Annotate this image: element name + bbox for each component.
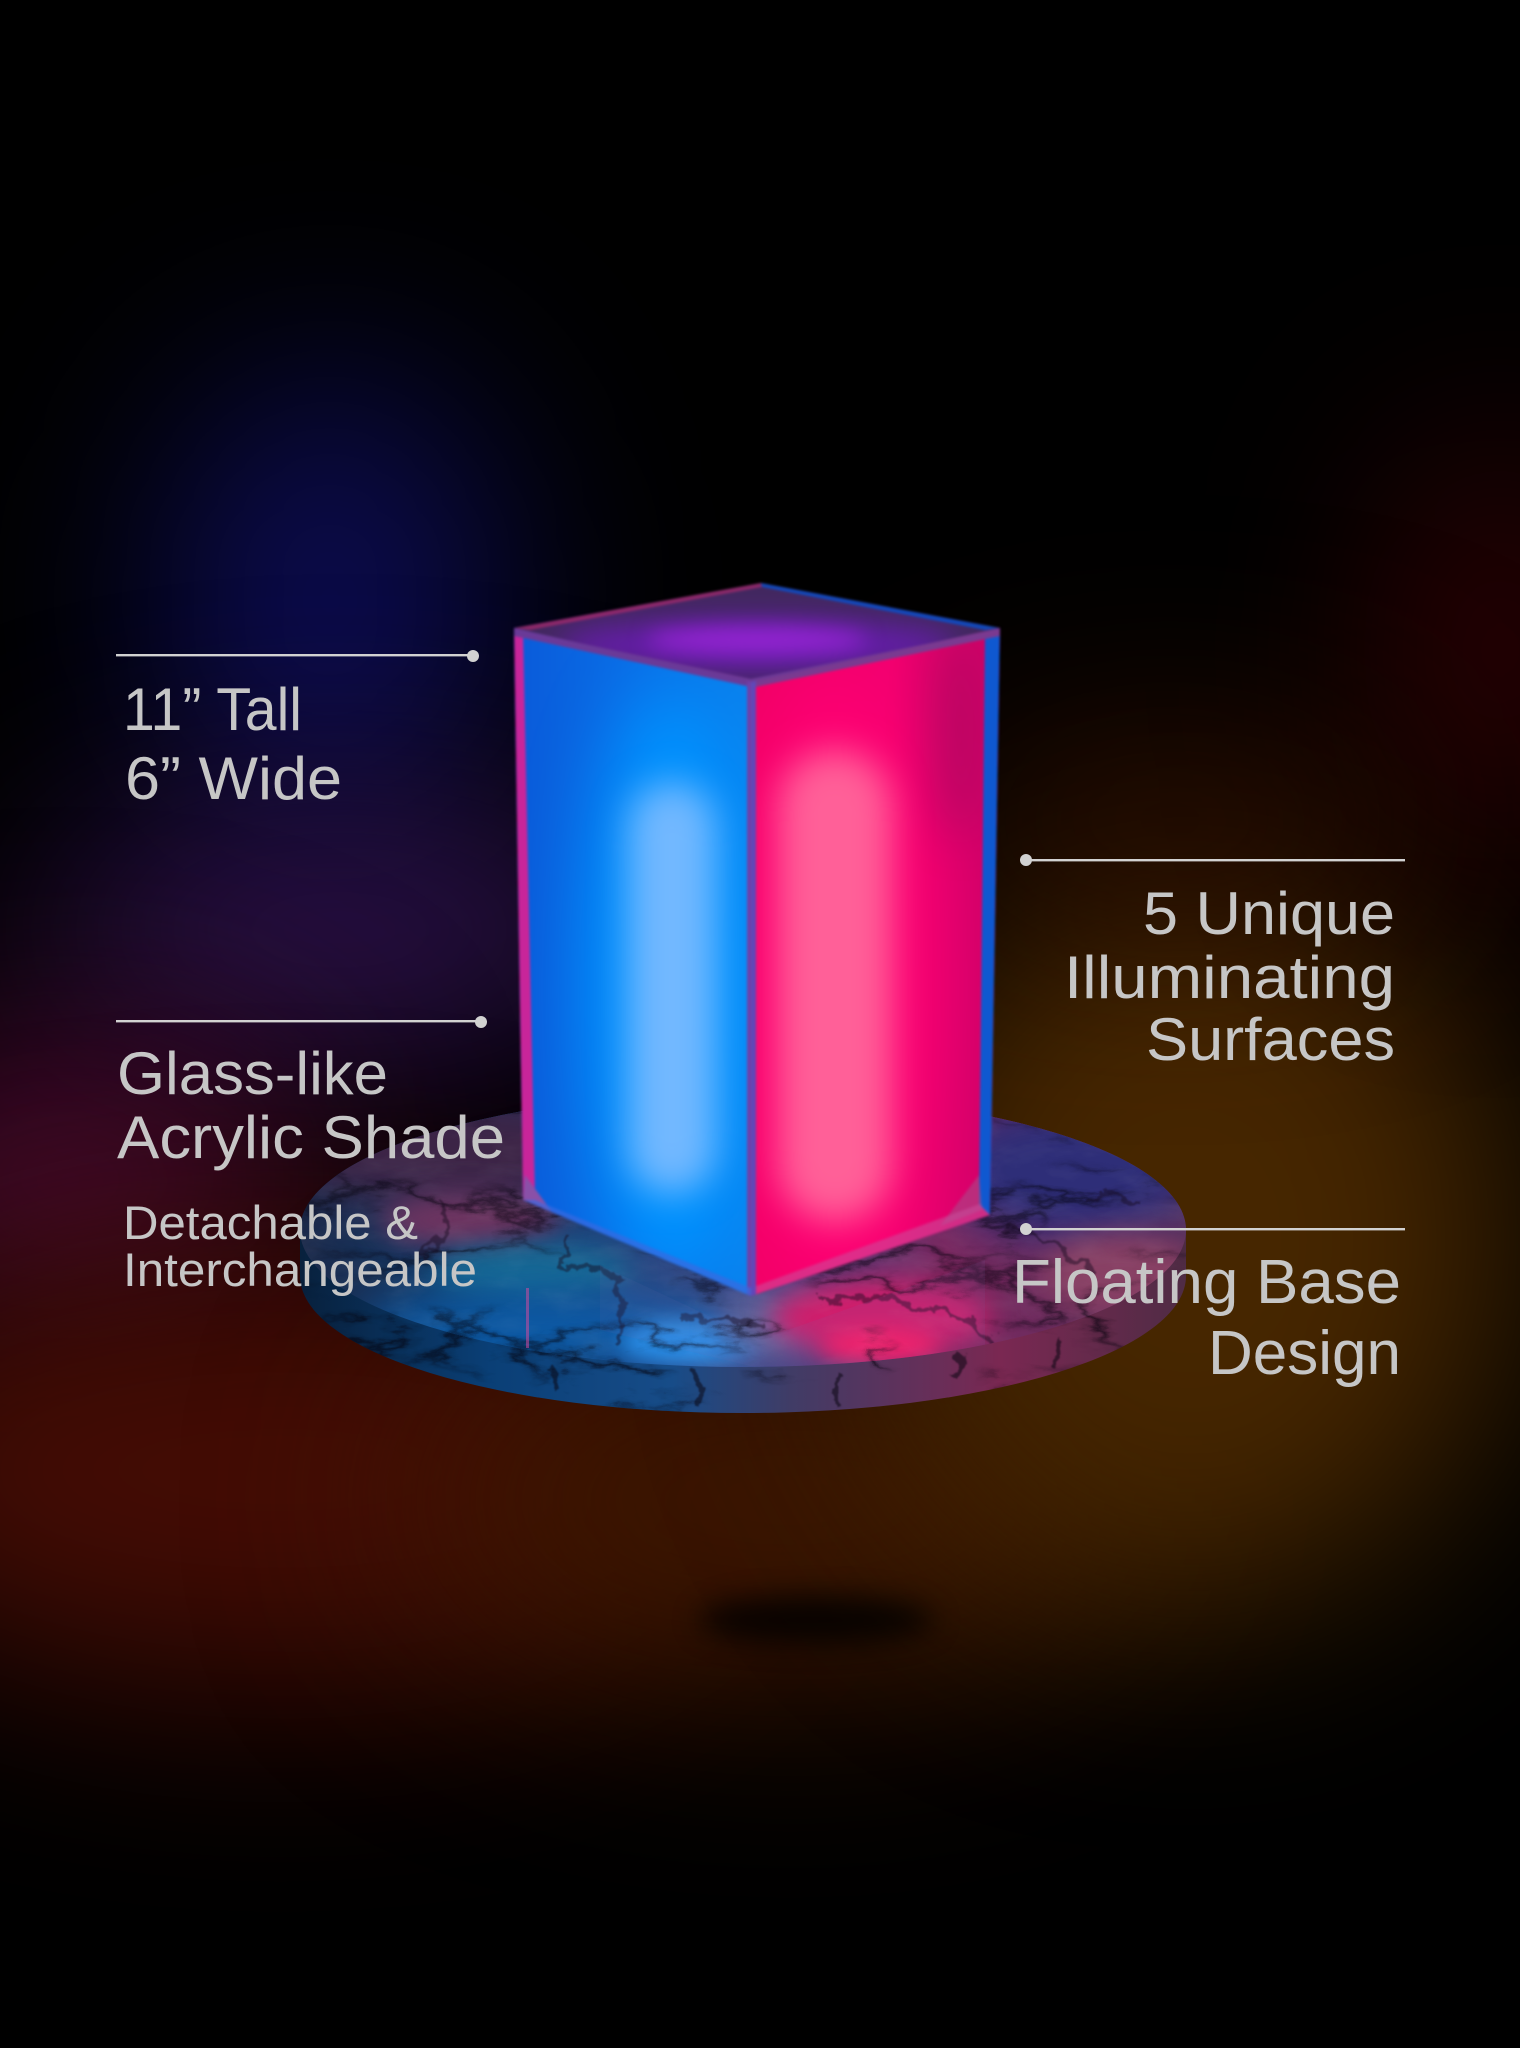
- sub text: Detachable &: [123, 1196, 418, 1249]
- callout: illuminating surfaces: [1020, 854, 1405, 1073]
- label text: 11” Tall: [123, 676, 302, 743]
- blue face: [512, 629, 752, 1297]
- heading text: [117, 1040, 505, 1171]
- lamp outer rim: [514, 583, 1000, 1296]
- leader line: [1020, 854, 1405, 866]
- label text: 6” Wide: [125, 745, 342, 812]
- leader line: [116, 650, 479, 662]
- leader line: [1020, 1223, 1405, 1235]
- sub text: [123, 1196, 477, 1296]
- lamp reflection: [600, 1260, 985, 1366]
- marble cracks: [420, 1196, 1140, 1350]
- heading text: Glass-like: [117, 1040, 388, 1107]
- infographic scene: [0, 272, 1520, 1802]
- label text: Design: [1208, 1319, 1401, 1388]
- lamp shade: [500, 583, 1008, 1310]
- label text: [1064, 880, 1395, 1073]
- label text: [123, 676, 342, 812]
- heading text: Acrylic Shade: [117, 1104, 505, 1171]
- base side wall: [300, 1111, 1186, 1413]
- sub text: Interchangeable: [123, 1243, 477, 1296]
- label text: Illuminating: [1064, 944, 1395, 1011]
- pink face: [745, 620, 1008, 1310]
- callout: shade material: [116, 1016, 505, 1296]
- base top surface: [301, 1111, 1186, 1367]
- callout: floating base: [1012, 1223, 1405, 1388]
- label text: Surfaces: [1146, 1006, 1395, 1073]
- floating shadow: [698, 1596, 934, 1644]
- marble base: [300, 1111, 1186, 1413]
- callout: height and width: [116, 650, 479, 812]
- leader line: [116, 1016, 487, 1028]
- label text: [1012, 1248, 1401, 1388]
- label text: Floating Base: [1012, 1248, 1401, 1317]
- label text: 5 Unique: [1143, 880, 1395, 947]
- top face: [514, 583, 1000, 682]
